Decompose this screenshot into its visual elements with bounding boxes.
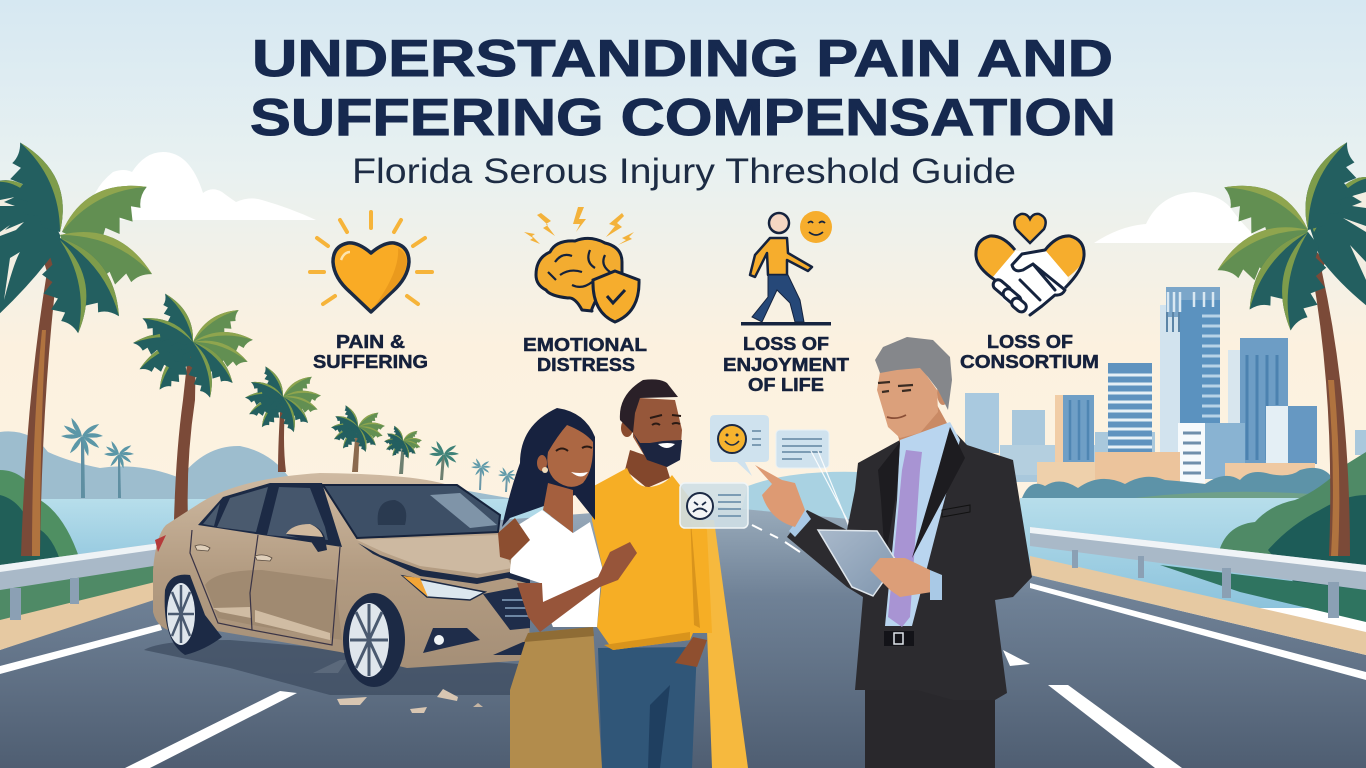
mouth [887, 415, 906, 418]
palm: small [245, 364, 321, 472]
fog lamp housing [423, 628, 480, 653]
palm: large left [0, 135, 160, 556]
label: pain and suffering: PAIN & [336, 332, 405, 352]
right lapel [912, 427, 965, 558]
label: loss of consortium: CONSORTIUM [960, 352, 1099, 372]
green verge left [0, 560, 160, 625]
label: loss of enjoyment of life: OF LIFE [748, 375, 824, 395]
shirt cuff left [789, 510, 811, 537]
jacket [787, 427, 1032, 700]
label: pain and suffering: SUFFERING [313, 352, 428, 372]
face [877, 366, 938, 438]
palm: far 2 [498, 467, 516, 492]
feedback bubbles [680, 415, 852, 529]
far shore [1135, 492, 1312, 498]
label: loss of enjoyment of life: LOSS OF [743, 334, 829, 354]
water and hills middle [740, 472, 880, 525]
left lapel [878, 442, 900, 560]
palm: small 4 [429, 440, 459, 480]
man sweater hem shade [604, 510, 700, 650]
man eyes [650, 415, 681, 425]
woman waistband [524, 627, 594, 642]
man ear [621, 419, 633, 437]
ear [937, 381, 949, 405]
label: loss of consortium [960, 332, 1099, 372]
attorney [755, 337, 1032, 768]
woman arm [517, 542, 637, 632]
woman pants [510, 627, 602, 768]
cloud right [1094, 192, 1262, 243]
mirror [287, 524, 327, 552]
woman hair [502, 408, 595, 527]
bushes right dark [1268, 495, 1366, 610]
sky background [0, 0, 1366, 560]
title: UNDERSTANDING PAIN AND [252, 30, 1113, 88]
grille [483, 585, 530, 630]
happy bubble [710, 415, 769, 476]
hair [875, 337, 952, 410]
car shadow [144, 640, 530, 695]
wrecked car [144, 473, 530, 695]
pocket [942, 505, 970, 517]
headlight [403, 576, 485, 600]
water right [1020, 498, 1366, 608]
shirt [885, 422, 960, 626]
title [250, 30, 1116, 147]
title: SUFFERING COMPENSATION [250, 89, 1116, 147]
tree line across the bay [1022, 468, 1330, 498]
windshield glare [430, 493, 497, 528]
man jeans [598, 647, 697, 768]
woman earring [542, 467, 548, 473]
palm: small 3 [384, 424, 422, 474]
man beard [633, 433, 682, 467]
right guardrail [1030, 527, 1366, 618]
woman neck [543, 483, 573, 533]
label: emotional distress [523, 335, 647, 375]
icon: brain and shield [524, 207, 639, 322]
fog light [434, 635, 444, 645]
woman face [547, 425, 593, 487]
door lines [190, 530, 340, 645]
label: emotional distress: EMOTIONAL [523, 335, 647, 355]
belt buckle [894, 633, 903, 644]
shirt cuff right [930, 570, 942, 600]
debris [337, 689, 483, 713]
label: emotional distress: DISTRESS [537, 355, 635, 375]
belt [884, 631, 914, 646]
label: loss of consortium: LOSS OF [987, 332, 1073, 352]
couple [498, 379, 712, 768]
tie [888, 450, 922, 627]
palm: small 2 [331, 403, 385, 472]
hood [357, 535, 512, 574]
door handles [195, 545, 272, 561]
skyline [965, 287, 1366, 490]
icon: heart with rays [310, 212, 432, 312]
label: loss of enjoyment of life [723, 334, 849, 395]
label: pain and suffering [313, 332, 428, 372]
grille slats [502, 600, 530, 616]
subtitle: Florida Serous Injury Threshold Guide [352, 152, 1016, 191]
yellow centre line [703, 520, 748, 768]
rear wheel [165, 575, 222, 655]
man hair [620, 379, 678, 433]
pointing hand [755, 465, 805, 527]
woman shirt [510, 510, 602, 627]
cloud left [88, 152, 316, 220]
woman eyes [556, 446, 592, 451]
left guardrail [0, 543, 160, 620]
man smile [658, 443, 675, 448]
water left [0, 499, 560, 579]
text bubble [776, 430, 852, 529]
headlight amber [403, 576, 428, 597]
woman ear [537, 455, 547, 471]
door highlights [213, 607, 330, 640]
left sidewalk [0, 582, 160, 650]
rear tail light [155, 535, 166, 552]
palm: large right [1210, 135, 1366, 556]
seats [378, 500, 406, 525]
green verge right [1160, 565, 1366, 622]
right sidewalk [1030, 556, 1366, 655]
hood crumple [358, 543, 530, 584]
bushes right [1218, 452, 1366, 605]
woman smile [571, 472, 588, 476]
road markings [0, 525, 1366, 768]
sad bubble [680, 483, 748, 528]
man hand in pocket [675, 637, 707, 667]
palm: hazy left 1 [61, 417, 103, 498]
icon: walking figure [741, 211, 832, 326]
car body [153, 473, 530, 668]
icon: handshake heart [976, 214, 1084, 315]
label: loss of enjoyment of life: ENJOYMENT [723, 355, 849, 375]
man face [633, 398, 682, 467]
neck [895, 405, 948, 465]
quarter window [203, 503, 220, 526]
distant hills left [0, 431, 520, 500]
road surface [0, 505, 1366, 768]
bushes left dark [0, 495, 60, 570]
window frame [198, 483, 342, 547]
front side window [267, 487, 328, 540]
right hand [870, 558, 932, 597]
man sweater [592, 468, 712, 650]
trousers [865, 690, 995, 768]
palm: hazy left 2 [104, 440, 134, 498]
tablet [818, 530, 897, 596]
bushes left [0, 470, 80, 575]
rear side window [217, 487, 268, 532]
front wheel [343, 593, 405, 687]
lower grille [493, 642, 530, 655]
palm: far 1 [471, 458, 491, 490]
man neck [625, 450, 670, 488]
windshield [323, 485, 500, 538]
man hand on shoulder [498, 518, 530, 560]
eyes [878, 382, 913, 392]
lower door shade [205, 570, 342, 640]
palm: medium left [133, 289, 253, 520]
man jeans shade [648, 685, 670, 768]
